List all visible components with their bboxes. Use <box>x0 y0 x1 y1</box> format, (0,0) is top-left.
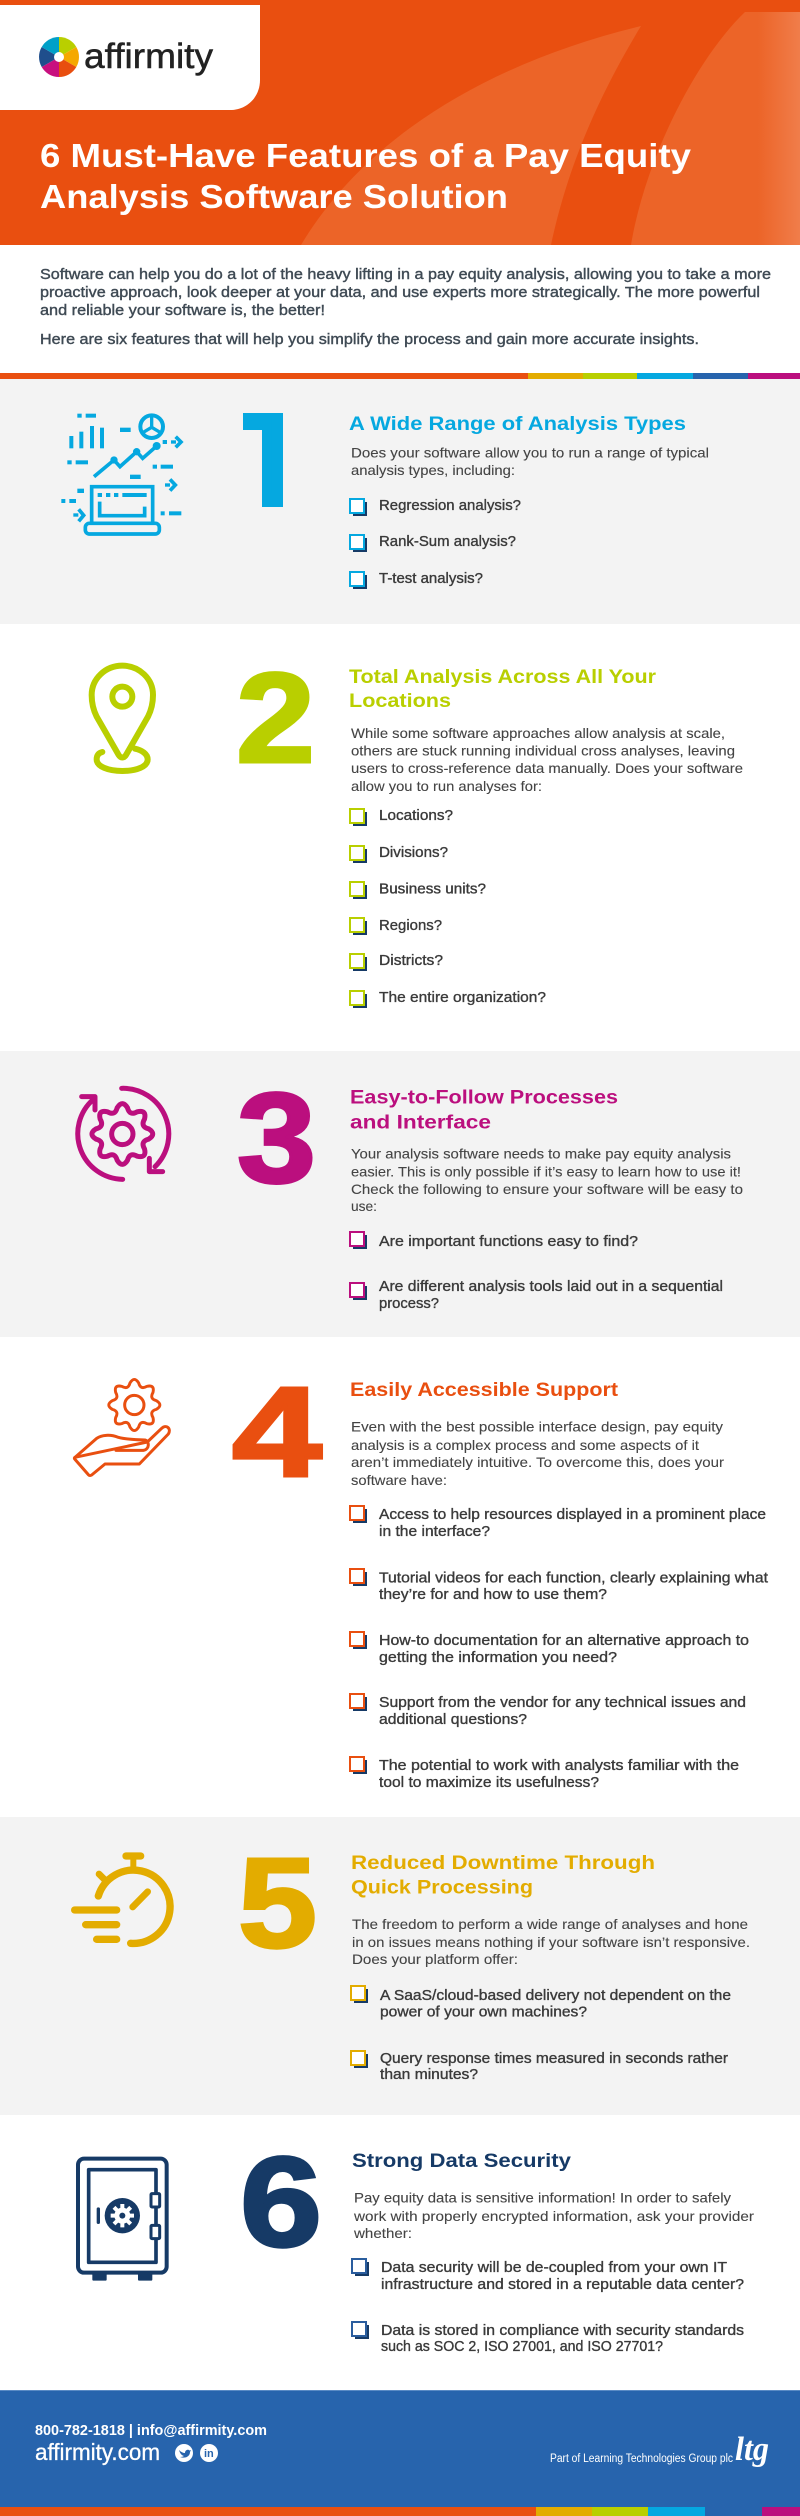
ltg logo: ltg <box>735 2431 769 2468</box>
number 1: 1 <box>230 388 292 535</box>
panel: feature 5 <box>0 1817 800 2115</box>
checklist: Data security will be de-coupled from your own IT <box>381 2260 727 2276</box>
checklist: Data is stored in compliance with security standards <box>381 2323 744 2339</box>
heading: and Interface <box>350 1112 491 1134</box>
panel: feature 1 <box>0 379 800 624</box>
body text: The freedom to perform a wide range of analyses and hone <box>352 1916 748 1932</box>
checklist <box>350 1506 768 1791</box>
panel: feature 6 <box>0 2115 800 2390</box>
checklist: in the interface? <box>379 1524 490 1540</box>
checklist <box>351 1986 731 2083</box>
panel: feature 4 <box>0 1337 800 1817</box>
checklist: Business units? <box>379 882 486 898</box>
checklist: than minutes? <box>380 2067 478 2083</box>
body text <box>351 444 709 478</box>
body text: Pay equity data is sensitive information! In order to safely <box>354 2190 731 2206</box>
title: 6 Must-Have Features of a Pay Equity <box>40 137 692 174</box>
checklist: infrastructure and stored in a reputable data center? <box>381 2277 744 2293</box>
checklist <box>352 2259 744 2355</box>
checklist <box>350 1232 723 1312</box>
body text: in on issues means nothing if your software isn’t responsive. <box>352 1934 750 1950</box>
heading: Locations <box>349 690 451 712</box>
title <box>40 137 692 215</box>
checklist: additional questions? <box>379 1712 527 1728</box>
checklist: Rank-Sum analysis? <box>379 534 516 550</box>
checklist: power of your own machines? <box>380 2004 587 2020</box>
checklist: Regions? <box>379 918 442 934</box>
checklist: How-to documentation for an alternative approach to <box>379 1633 749 1649</box>
body text: allow you to run analyses for: <box>351 778 542 794</box>
body text: While some software approaches allow analysis at scale, <box>351 725 725 741</box>
body text: Does your software allow you to run a range of typical <box>351 444 709 460</box>
number 1 <box>243 413 283 507</box>
number 4: 4 <box>232 1361 322 1504</box>
body text <box>351 1418 724 1488</box>
checklist: Tutorial videos for each function, clearly explaining what <box>379 1570 768 1586</box>
bottom colour stripe <box>0 2507 800 2516</box>
heading: A Wide Range of Analysis Types <box>349 413 686 435</box>
body text: Does your platform offer: <box>352 1951 518 1967</box>
heading: Easy-to-Follow Processes <box>350 1086 618 1108</box>
body text <box>352 1916 750 1967</box>
panel: feature 2 <box>0 624 800 1051</box>
heading: Easily Accessible Support <box>350 1379 619 1401</box>
checklist: Are different analysis tools laid out in a sequential <box>379 1279 723 1295</box>
parent company line: Part of Learning Technologies Group plc <box>550 2453 733 2465</box>
footer <box>0 2390 800 2507</box>
body text: easier. This is only possible if it’s easy to learn how to use it! <box>351 1164 741 1180</box>
number 3: 3 <box>237 1067 316 1210</box>
title: Analysis Software Solution <box>40 178 508 215</box>
checklist: process? <box>379 1296 439 1312</box>
number 6: 6 <box>240 2131 322 2274</box>
checklist: A SaaS/cloud-based delivery not dependent on the <box>380 1988 731 2004</box>
body text <box>351 1146 743 1214</box>
heading: Total Analysis Across All Your <box>349 666 656 688</box>
checklist: Locations? <box>379 808 453 824</box>
checklist: they’re for and how to use them? <box>379 1587 607 1603</box>
checklist: getting the information you need? <box>379 1650 617 1666</box>
body text: analysis is a complex process and some aspects of it <box>351 1437 699 1453</box>
checklist <box>350 808 546 1008</box>
checklist: T-test analysis? <box>379 571 483 587</box>
body text <box>351 725 743 794</box>
intro text: Software can help you do a lot of the heavy lifting in a pay equity analysis, allowing you to take a more <box>40 266 771 283</box>
rainbow divider <box>0 373 800 379</box>
body text: Check the following to ensure your software will be easy to <box>351 1181 743 1197</box>
icon: safe <box>78 2159 167 2281</box>
heading: Quick Processing <box>351 1876 533 1898</box>
logo panel <box>0 5 260 110</box>
icon: hand with gear <box>74 1379 169 1476</box>
checklist: The entire organization? <box>379 990 546 1006</box>
body text: Even with the best possible interface design, pay equity <box>351 1418 723 1434</box>
intro text <box>40 266 771 348</box>
checklist: Query response times measured in seconds rather <box>380 2051 728 2067</box>
icon: twitter <box>175 2444 193 2462</box>
body text: Your analysis software needs to make pay equity analysis <box>351 1146 731 1162</box>
number 2: 2 <box>236 647 315 790</box>
intro text: Here are six features that will help you simplify the process and gain more accurate insights. <box>40 331 699 348</box>
number 5: 5 <box>238 1832 317 1975</box>
checklist: Divisions? <box>379 845 448 861</box>
body text: aren’t immediately intuitive. To overcome this, does your <box>351 1454 724 1470</box>
body text: analysis types, including: <box>351 462 515 478</box>
body text: users to cross-reference data manually. Does your software <box>351 760 743 776</box>
logo wordmark: affirmity <box>84 37 214 76</box>
body text: software have: <box>351 1472 447 1488</box>
checklist: Support from the vendor for any technical issues and <box>379 1695 746 1711</box>
body text: work with properly encrypted information, ask your provider <box>353 2208 754 2224</box>
icon: laptop with charts <box>61 414 181 534</box>
checklist: Access to help resources displayed in a prominent place <box>379 1507 766 1523</box>
heading <box>351 1852 655 1898</box>
panel: feature 3 <box>0 1051 800 1337</box>
checklist: The potential to work with analysts familiar with the <box>379 1758 739 1774</box>
icon: stopwatch <box>75 1856 170 1943</box>
website: affirmity.com <box>35 2439 160 2465</box>
icon: linkedin: in <box>204 2448 214 2460</box>
heading <box>350 1086 618 1134</box>
checklist: Districts? <box>379 953 443 969</box>
heading: Reduced Downtime Through <box>351 1852 655 1874</box>
checklist <box>350 498 521 589</box>
icon: linkedin <box>200 2444 218 2462</box>
heading <box>349 666 656 712</box>
icon: gear with arrows <box>78 1088 169 1179</box>
checklist: such as SOC 2, ISO 27001, and ISO 27701? <box>381 2339 663 2355</box>
body text: whether: <box>353 2225 412 2241</box>
intro text: proactive approach, look deeper at your data, and use experts more strategically. The more powerful <box>40 284 760 301</box>
checklist: Are important functions easy to find? <box>379 1234 638 1250</box>
icon: affirmity pinwheel <box>39 37 79 77</box>
header banner <box>0 0 800 245</box>
icon: location pin <box>92 666 153 771</box>
checklist: Regression analysis? <box>379 498 521 514</box>
heading: Strong Data Security <box>352 2150 571 2172</box>
body text <box>353 2190 754 2241</box>
checklist: tool to maximize its usefulness? <box>379 1775 599 1791</box>
intro text: and reliable your software is, the better! <box>40 302 325 319</box>
body text: use: <box>351 1198 377 1214</box>
contact line: 800-782-1818 | info@affirmity.com <box>35 2422 267 2439</box>
body text: others are stuck running individual cross analyses, leaving <box>351 742 735 758</box>
